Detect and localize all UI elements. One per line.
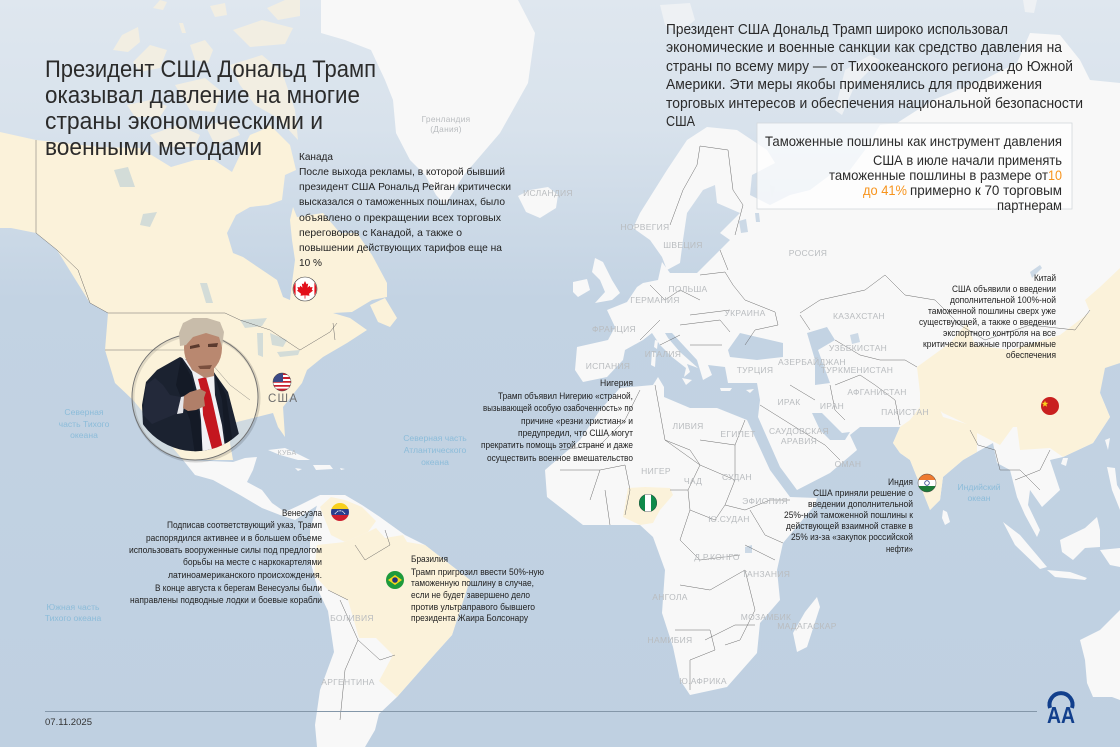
map labels: country names: ЧАД xyxy=(684,476,702,486)
map labels: country names: УКРАИНА xyxy=(724,308,766,318)
text block: Brazil: Трамп пригрозил ввести 50%-ную xyxy=(411,566,544,577)
land: Australia xyxy=(1080,610,1120,700)
map labels: country names: ОМАН xyxy=(835,459,861,469)
text block: India: США приняли решение о xyxy=(813,487,913,498)
map labels: country names: ТАНЗАНИЯ xyxy=(742,569,790,579)
intro paragraph: страны по всему миру — от Тихоокеанского региона до Южной xyxy=(666,59,1073,75)
map labels: country names: ИРАН xyxy=(820,401,844,411)
text block: Nigeria: Нигерия xyxy=(600,377,633,388)
text block: Canada: 10 % xyxy=(299,257,322,269)
map labels: country names: НОРВЕГИЯ xyxy=(620,222,670,232)
text block: Nigeria: предупредил, что США могут xyxy=(518,427,634,438)
land: India xyxy=(893,393,1013,510)
map labels: country names: ЭФИОПИЯ xyxy=(742,496,788,506)
text block: China: существующей, а также о введении xyxy=(919,316,1056,327)
Brazil xyxy=(314,528,470,697)
text block: China: экспортного контроля на все xyxy=(943,327,1056,338)
map labels: country names: СУДАН xyxy=(722,472,752,482)
land: Eurasia xyxy=(575,33,1120,537)
text block: China: обеспечения xyxy=(1006,349,1056,360)
map labels: country names: КУБА xyxy=(278,450,296,457)
logo: Anadolu Agency: AA xyxy=(1047,702,1075,728)
title: страны экономическими и xyxy=(45,108,323,135)
icon: Venezuela flag xyxy=(331,503,349,521)
text block: Nigeria: причине «резни христиан» и xyxy=(521,415,633,426)
icon: Brazil flag xyxy=(386,571,404,589)
map labels: country names: ЛИВИЯ xyxy=(672,421,704,431)
text block: Canada xyxy=(299,151,511,269)
text block: India: нефти» xyxy=(886,543,913,554)
land: Madagascar xyxy=(793,597,820,652)
text block: Canada: объявлено о прекращении всех торговых xyxy=(299,212,502,224)
text block: China: критически важные программные xyxy=(923,338,1056,349)
map labels: oceans: океан xyxy=(968,493,991,503)
land: China xyxy=(917,268,1120,457)
map labels: country names xyxy=(278,114,929,687)
Venezuela xyxy=(320,497,376,542)
map labels: country names: НИГЕР xyxy=(641,466,671,476)
text block: India xyxy=(784,476,914,554)
icon: Canada flag xyxy=(293,277,317,301)
text block: Canada: президент США Рональд Рейган критически xyxy=(299,181,511,193)
map labels: country names: Д.Р.КОНГО xyxy=(694,552,740,562)
text block: India: 25% из-за «закупок российской xyxy=(791,531,913,542)
text block: China: таможенной пошлины сверх уже xyxy=(928,305,1056,316)
date: 07.11.2025 xyxy=(45,717,92,728)
intro paragraph: Америки. Эти меры якобы применялись для продвижения xyxy=(666,77,1042,93)
text block: Venezuela: Подписав соответствующий указ, Трамп xyxy=(167,519,322,530)
land: Southeast Asia islands xyxy=(942,438,1120,580)
text block: India: действующей взаимной ставке в xyxy=(786,520,913,531)
footer rule xyxy=(45,711,1037,712)
land: Iceland xyxy=(518,187,558,218)
map labels: oceans: океана xyxy=(70,430,98,440)
title: Президент США Дональд Трамп xyxy=(45,56,376,83)
text block: Venezuela: латиноамериканского происхождения. xyxy=(168,569,322,580)
text block: Brazil: президента Жаира Болсонару xyxy=(411,612,528,623)
intro paragraph: экономические и военные санкции как средство давления на xyxy=(666,40,1063,56)
map labels: country names: ТУРКМЕНИСТАН xyxy=(821,365,893,375)
land: Nigeria xyxy=(623,487,673,525)
text block: Nigeria: вызывающей особую озабоченность» по xyxy=(483,402,633,413)
text block: Venezuela: направлены подводные лодки и боевые корабли xyxy=(130,594,322,605)
text block: Venezuela: распорядился активнее и в большем объеме xyxy=(146,532,322,543)
title: военными методами xyxy=(45,134,262,161)
map labels: country names: БОЛИВИЯ xyxy=(330,613,374,623)
map labels: country names: ШВЕЦИЯ xyxy=(663,240,703,250)
title xyxy=(45,56,376,161)
map labels: oceans: Северная xyxy=(64,407,104,417)
land: North America xyxy=(0,125,387,460)
map labels: country names: Ю.АФРИКА xyxy=(679,676,727,686)
national borders xyxy=(36,140,1090,720)
inland water: Ladoga, Onega, Aral, Baikal, Victoria xyxy=(739,185,1042,553)
map labels: country names: КАЗАХСТАН xyxy=(833,311,885,321)
text block: Brazil: если не будет завершено дело xyxy=(411,589,530,600)
map labels: country names: АНГОЛА xyxy=(652,592,688,602)
icon: India flag xyxy=(918,474,936,492)
callout body xyxy=(829,152,1062,213)
land: South America xyxy=(310,495,470,747)
map labels: oceans: Южная часть xyxy=(47,602,100,612)
lakes xyxy=(114,167,300,357)
map labels: country names: ИТАЛИЯ xyxy=(645,349,681,359)
map labels: oceans: Атлантического xyxy=(404,445,466,455)
intro paragraph: США xyxy=(666,114,695,130)
map labels: country names: (Дания) xyxy=(430,124,462,134)
text block: India: Индия xyxy=(888,476,913,487)
map labels: country names: САУДОВСКАЯ xyxy=(769,426,829,436)
map labels: country names: МАДАГАСКАР xyxy=(777,621,837,631)
map labels: oceans: Индийский xyxy=(957,482,1001,492)
text block: Nigeria: прекратить помощь этой стране и даже xyxy=(481,439,633,450)
text block: Venezuela: В конце августа к берегам Венесуэлы были xyxy=(155,582,322,593)
text block: Nigeria: осуществить военное вмешательство xyxy=(487,452,633,463)
map labels: oceans: Северная часть xyxy=(403,433,467,443)
portrait: Donald Trump in circle xyxy=(132,318,259,465)
icon: Nigeria flag xyxy=(639,494,657,512)
callout heading: Таможенные пошлины как инструмент давления xyxy=(765,133,1062,149)
land: British Isles and Mediterranean islands xyxy=(573,258,754,393)
panel: tariffs callout xyxy=(757,123,1072,213)
map labels: oceans: часть Тихого xyxy=(59,419,110,429)
text block: Nigeria: Трамп объявил Нигерию «страной, xyxy=(498,390,633,401)
intro paragraph: торговых интересов и обеспечения национальной безопасности xyxy=(666,96,1083,112)
map labels: country names: ПАКИСТАН xyxy=(881,407,929,417)
map labels: country names: АФГАНИСТАН xyxy=(847,387,907,397)
text block: Nigeria xyxy=(481,377,634,463)
callout body: примерно к 70 торговым xyxy=(910,182,1062,198)
title: оказывал давление на многие xyxy=(45,82,360,109)
text block: China: дополнительной 100%-ной xyxy=(950,294,1056,305)
map labels: oceans: Тихого океана xyxy=(45,613,101,623)
text block: Venezuela: борьбы на месте с наркокартелями xyxy=(183,556,322,567)
map labels: country names: ИРАК xyxy=(777,397,801,407)
map labels: country names: МОЗАМБИК xyxy=(741,612,791,622)
map labels: country names: АРАВИЯ xyxy=(781,436,817,446)
text block: China: Китай xyxy=(1034,272,1056,283)
map labels: country names: НАМИБИЯ xyxy=(648,635,692,645)
seas: Black Sea, Caspian, Persian Gulf xyxy=(728,327,850,440)
callout body: до 41% xyxy=(863,182,907,198)
text block: Brazil: Бразилия xyxy=(411,553,448,564)
land: Central America and Caribbean xyxy=(183,448,345,520)
text block: Canada: Канада xyxy=(299,151,333,163)
land: Canadian Arctic islands xyxy=(113,0,300,147)
map labels: oceans: океана xyxy=(421,457,449,467)
land: Arctic islands xyxy=(660,0,1037,115)
map labels: country names: ГЕРМАНИЯ xyxy=(630,295,680,305)
land: Africa xyxy=(545,377,817,695)
icon: USA flag xyxy=(273,373,291,392)
land: Greenland xyxy=(321,0,535,205)
map labels: country names: АЗЕРБАЙДЖАН xyxy=(778,356,846,367)
callout body: партнерам xyxy=(997,197,1062,213)
text block: Brazil: таможенную пошлину в случае, xyxy=(411,577,534,588)
intro paragraph: Президент США Дональд Трамп широко использовал xyxy=(666,22,1008,38)
map labels: country names: ТУРЦИЯ xyxy=(737,365,773,375)
map labels: country names: ИСЛАНДИЯ xyxy=(523,188,573,198)
land: Newfoundland xyxy=(370,298,397,327)
text block: India: 25%-ной таможенной пошлины к xyxy=(784,509,914,520)
map labels: oceans xyxy=(45,407,1001,623)
map labels: country names: УЗБЕКИСТАН xyxy=(829,343,887,353)
map labels: country names: АРГЕНТИНА xyxy=(321,677,375,687)
label: USA: США xyxy=(268,393,297,405)
text block: China: США объявили о введении xyxy=(952,283,1056,294)
text block: China xyxy=(919,272,1056,360)
text block: Venezuela xyxy=(129,507,323,605)
callout body: США в июле начали применять xyxy=(873,152,1062,168)
callout body: 10 xyxy=(1048,167,1062,183)
text block: Canada: После выхода рекламы, в которой бывший xyxy=(299,166,505,178)
map labels: country names: ИСПАНИЯ xyxy=(586,361,630,371)
text block: India: введении дополнительной xyxy=(808,498,913,509)
text block: Venezuela: использовать вооруженные силы под предлогом xyxy=(129,544,322,555)
text block: Canada: переговоров с Канадой, а также о xyxy=(299,227,462,239)
label: Greenland: Гренландия xyxy=(422,114,470,124)
map labels: country names: ФРАНЦИЯ xyxy=(592,324,636,334)
text block: Canada: повышении действующих тарифов еще на xyxy=(299,242,502,254)
intro paragraph xyxy=(666,22,1083,130)
text block: Venezuela: Венесуэла xyxy=(282,507,323,518)
icon: China flag xyxy=(1041,397,1059,415)
map labels: country names: Ю.СУДАН xyxy=(708,514,750,524)
map labels: country names: ПОЛЬША xyxy=(668,284,708,294)
text block: Brazil xyxy=(411,553,544,623)
logo: Anadolu Agency xyxy=(1047,693,1075,728)
map labels: country names: РОССИЯ xyxy=(789,248,827,258)
text block: Brazil: против ультраправого бывшего xyxy=(411,601,535,612)
text block: Canada: высказался о таможенных пошлинах, было xyxy=(299,196,505,208)
callout body: таможенные пошлины в размере от xyxy=(829,167,1049,183)
map labels: country names: ЕГИПЕТ xyxy=(720,429,756,439)
